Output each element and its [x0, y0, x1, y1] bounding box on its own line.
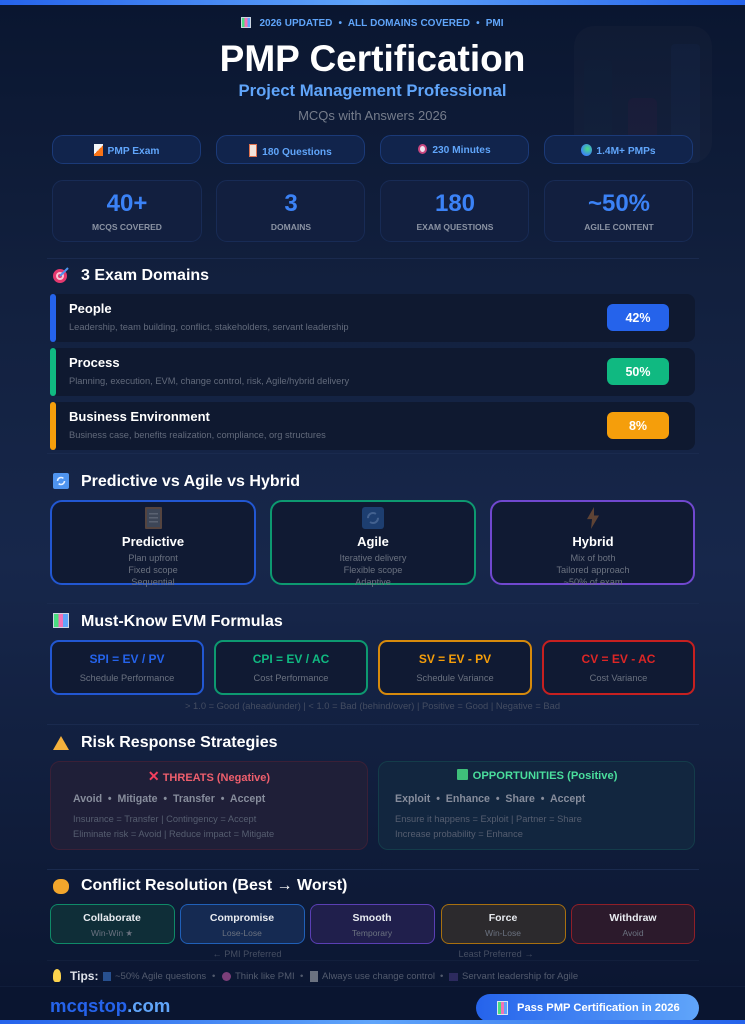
heading: 3 Exam Domains: 3 Exam Domains [81, 267, 209, 284]
stat: exam questions: EXAM QUESTIONS [416, 222, 493, 232]
domain: People [50, 294, 695, 342]
formula: SPI: Schedule Performance [80, 673, 174, 683]
card: Hybrid: Mix of both [571, 553, 615, 563]
tips line: Think like PMI [235, 971, 295, 982]
panel: opportunities: OPPORTUNITIES (Positive) [473, 770, 617, 782]
domain: People: Leadership, team building, conflict, stakeholders, servant leadership [69, 322, 349, 332]
formula: SPI: SPI = EV / PV [89, 652, 165, 666]
card: Agile [270, 500, 476, 585]
stat: agile content: AGILE CONTENT [584, 222, 654, 232]
domain: Process [50, 348, 695, 396]
conflict: Force [441, 904, 566, 944]
panel: threats [50, 761, 368, 850]
formula: SV [378, 640, 532, 695]
formula: CV [542, 640, 695, 695]
pill: PMP Exam: PMP Exam [108, 146, 159, 157]
label: PMI preferred: ← PMI Preferred [213, 949, 281, 959]
card: Hybrid: Tailored approach [556, 565, 630, 575]
domain: Business Environment: Business Environment [69, 409, 210, 424]
tips line: • [212, 971, 215, 982]
heading: Risk Response Strategies: Risk Response Strategies [81, 734, 278, 751]
card: Predictive: Predictive [122, 534, 184, 549]
bottom accent bar [0, 1020, 745, 1024]
heading: Must-Know EVM Formulas: Must-Know EVM Formulas [81, 613, 283, 630]
stat: domains [216, 180, 365, 242]
pill: 230 Minutes: 230 Minutes [432, 145, 491, 156]
formula: CPI: Cost Performance [254, 673, 328, 683]
title: PMP Certification [220, 38, 525, 79]
domain: People: People [69, 301, 112, 316]
eyebrow line: 2026 UPDATED • ALL DOMAINS COVERED • PMI [259, 18, 504, 29]
tagline: MCQs with Answers 2026 [298, 108, 447, 123]
conflict: Smooth: Smooth [352, 912, 392, 924]
icon: warning [53, 736, 69, 750]
conflict: Withdraw [571, 904, 695, 944]
formula: CV: Cost Variance [590, 673, 647, 683]
pill: 1.4M+ PMPs: 1.4M+ PMPs [596, 146, 656, 157]
tips line: Always use change control [322, 971, 435, 982]
conflict: Compromise: Lose-Lose [222, 928, 262, 938]
stat: domains: 3 [284, 190, 298, 217]
tips line: ~50% Agile questions [115, 971, 206, 982]
conflict: Smooth [310, 904, 435, 944]
panel: opportunities: Ensure it happens = Exploit | Partner = Share [395, 814, 582, 824]
conflict: Smooth: Temporary [352, 928, 392, 938]
stat: MCQs covered [52, 180, 202, 242]
panel: threats: Eliminate risk = Avoid | Reduce impact = Mitigate [73, 829, 274, 839]
card: Hybrid: ~50% of exam [564, 577, 622, 587]
panel: opportunities: Increase probability = Enhance [395, 829, 523, 839]
pill: 180 Questions: 180 Questions [262, 147, 332, 158]
stat: exam questions [380, 180, 529, 242]
top accent bar [0, 0, 745, 5]
conflict: Collaborate: Win-Win ★ [91, 928, 133, 938]
pill: 1.4M+ PMPs [544, 135, 693, 164]
pill: 230 Minutes [380, 135, 529, 164]
card: Predictive [50, 500, 256, 585]
domain: Business Environment: Business case, benefits realization, compliance, org structures [69, 430, 326, 440]
card: Agile: Iterative delivery [340, 553, 406, 563]
conflict: Force: Win-Lose [485, 928, 521, 938]
icon: chart [497, 1001, 508, 1015]
heading: Conflict Resolution: Conflict Resolution (Best → Worst) [81, 877, 347, 894]
formula: CPI: CPI = EV / AC [253, 652, 329, 666]
formula: SPI [50, 640, 204, 695]
tips line: Servant leadership for Agile [462, 971, 578, 982]
conflict: Compromise [180, 904, 305, 944]
stat: exam questions: 180 [435, 190, 475, 217]
stat: agile content [544, 180, 693, 242]
panel: threats: ✕ THREATS (Negative) [148, 768, 270, 784]
card: Hybrid [490, 500, 695, 585]
conflict: Compromise: Compromise [210, 912, 274, 924]
tips line: • [300, 971, 303, 982]
watermark chart icon [574, 26, 712, 163]
domain: Process: 50% [625, 365, 651, 379]
call to action button: Pass PMP Certification in 2026 [517, 1002, 680, 1014]
panel: opportunities [378, 761, 695, 850]
tips line: Tips: [70, 969, 98, 983]
icon: handshake [53, 879, 69, 894]
call to action button [476, 994, 699, 1022]
conflict: Force: Force [489, 912, 517, 924]
conflict: Withdraw: Avoid [622, 928, 644, 938]
icon: chart [53, 613, 69, 628]
icon: clipboard [145, 507, 162, 529]
domain: Process: Process [69, 355, 120, 370]
label: least preferred: Least Preferred → [458, 949, 534, 959]
icon: cycle [53, 473, 69, 489]
panel: threats: Insurance = Transfer | Contingency = Accept [73, 814, 256, 824]
icon: target [53, 267, 69, 283]
card: Hybrid: Hybrid [572, 534, 614, 549]
pill: PMP Exam [52, 135, 201, 164]
card: Agile: Agile [357, 534, 389, 549]
icon: light bulb [53, 969, 61, 982]
panel: opportunities: Exploit • Enhance • Share • Accept [395, 793, 585, 805]
domain: Business Environment [50, 402, 695, 450]
pill: 180 Questions [216, 135, 365, 164]
formula: SV: SV = EV - PV [419, 652, 491, 666]
brand: mcqstop.com [50, 995, 170, 1016]
domain: Process: Planning, execution, EVM, change control, risk, Agile/hybrid delivery [69, 376, 349, 386]
card: Predictive: Plan upfront [128, 553, 178, 563]
stat: domains: DOMAINS [271, 222, 311, 232]
tips line: • [440, 971, 443, 982]
formula: CV: CV = EV - AC [582, 652, 655, 666]
stat: MCQs covered: 40+ [107, 190, 147, 217]
formula: SV: Schedule Variance [416, 673, 494, 683]
tips line [53, 969, 578, 983]
heading: Predictive vs Agile vs Hybrid: Predictive vs Agile vs Hybrid [81, 473, 300, 490]
subtitle: Project Management Professional [238, 81, 506, 100]
card: Agile: Adaptive [355, 577, 391, 587]
card: Predictive: Fixed scope [128, 565, 178, 575]
panel: threats: Avoid • Mitigate • Transfer • Accept [73, 793, 265, 805]
conflict: Withdraw: Withdraw [609, 912, 657, 924]
icon: cycle [362, 507, 384, 529]
EVM note: > 1.0 = Good (ahead/under) | < 1.0 = Bad (behind/over) | Positive = Good | Negative = Bad [185, 701, 560, 711]
card: Agile: Flexible scope [344, 565, 402, 575]
domain: People: 42% [625, 311, 651, 325]
card: Predictive: Sequential [131, 577, 175, 587]
domain: Business Environment: 8% [629, 419, 647, 433]
conflict: Collaborate [50, 904, 175, 944]
footer bar [0, 986, 745, 1020]
stat: MCQs covered: MCQS COVERED [92, 222, 162, 232]
icon: lightning [587, 507, 599, 529]
formula: CPI [214, 640, 368, 695]
stat: agile content: ~50% [588, 190, 650, 217]
conflict: Collaborate: Collaborate [83, 912, 141, 924]
